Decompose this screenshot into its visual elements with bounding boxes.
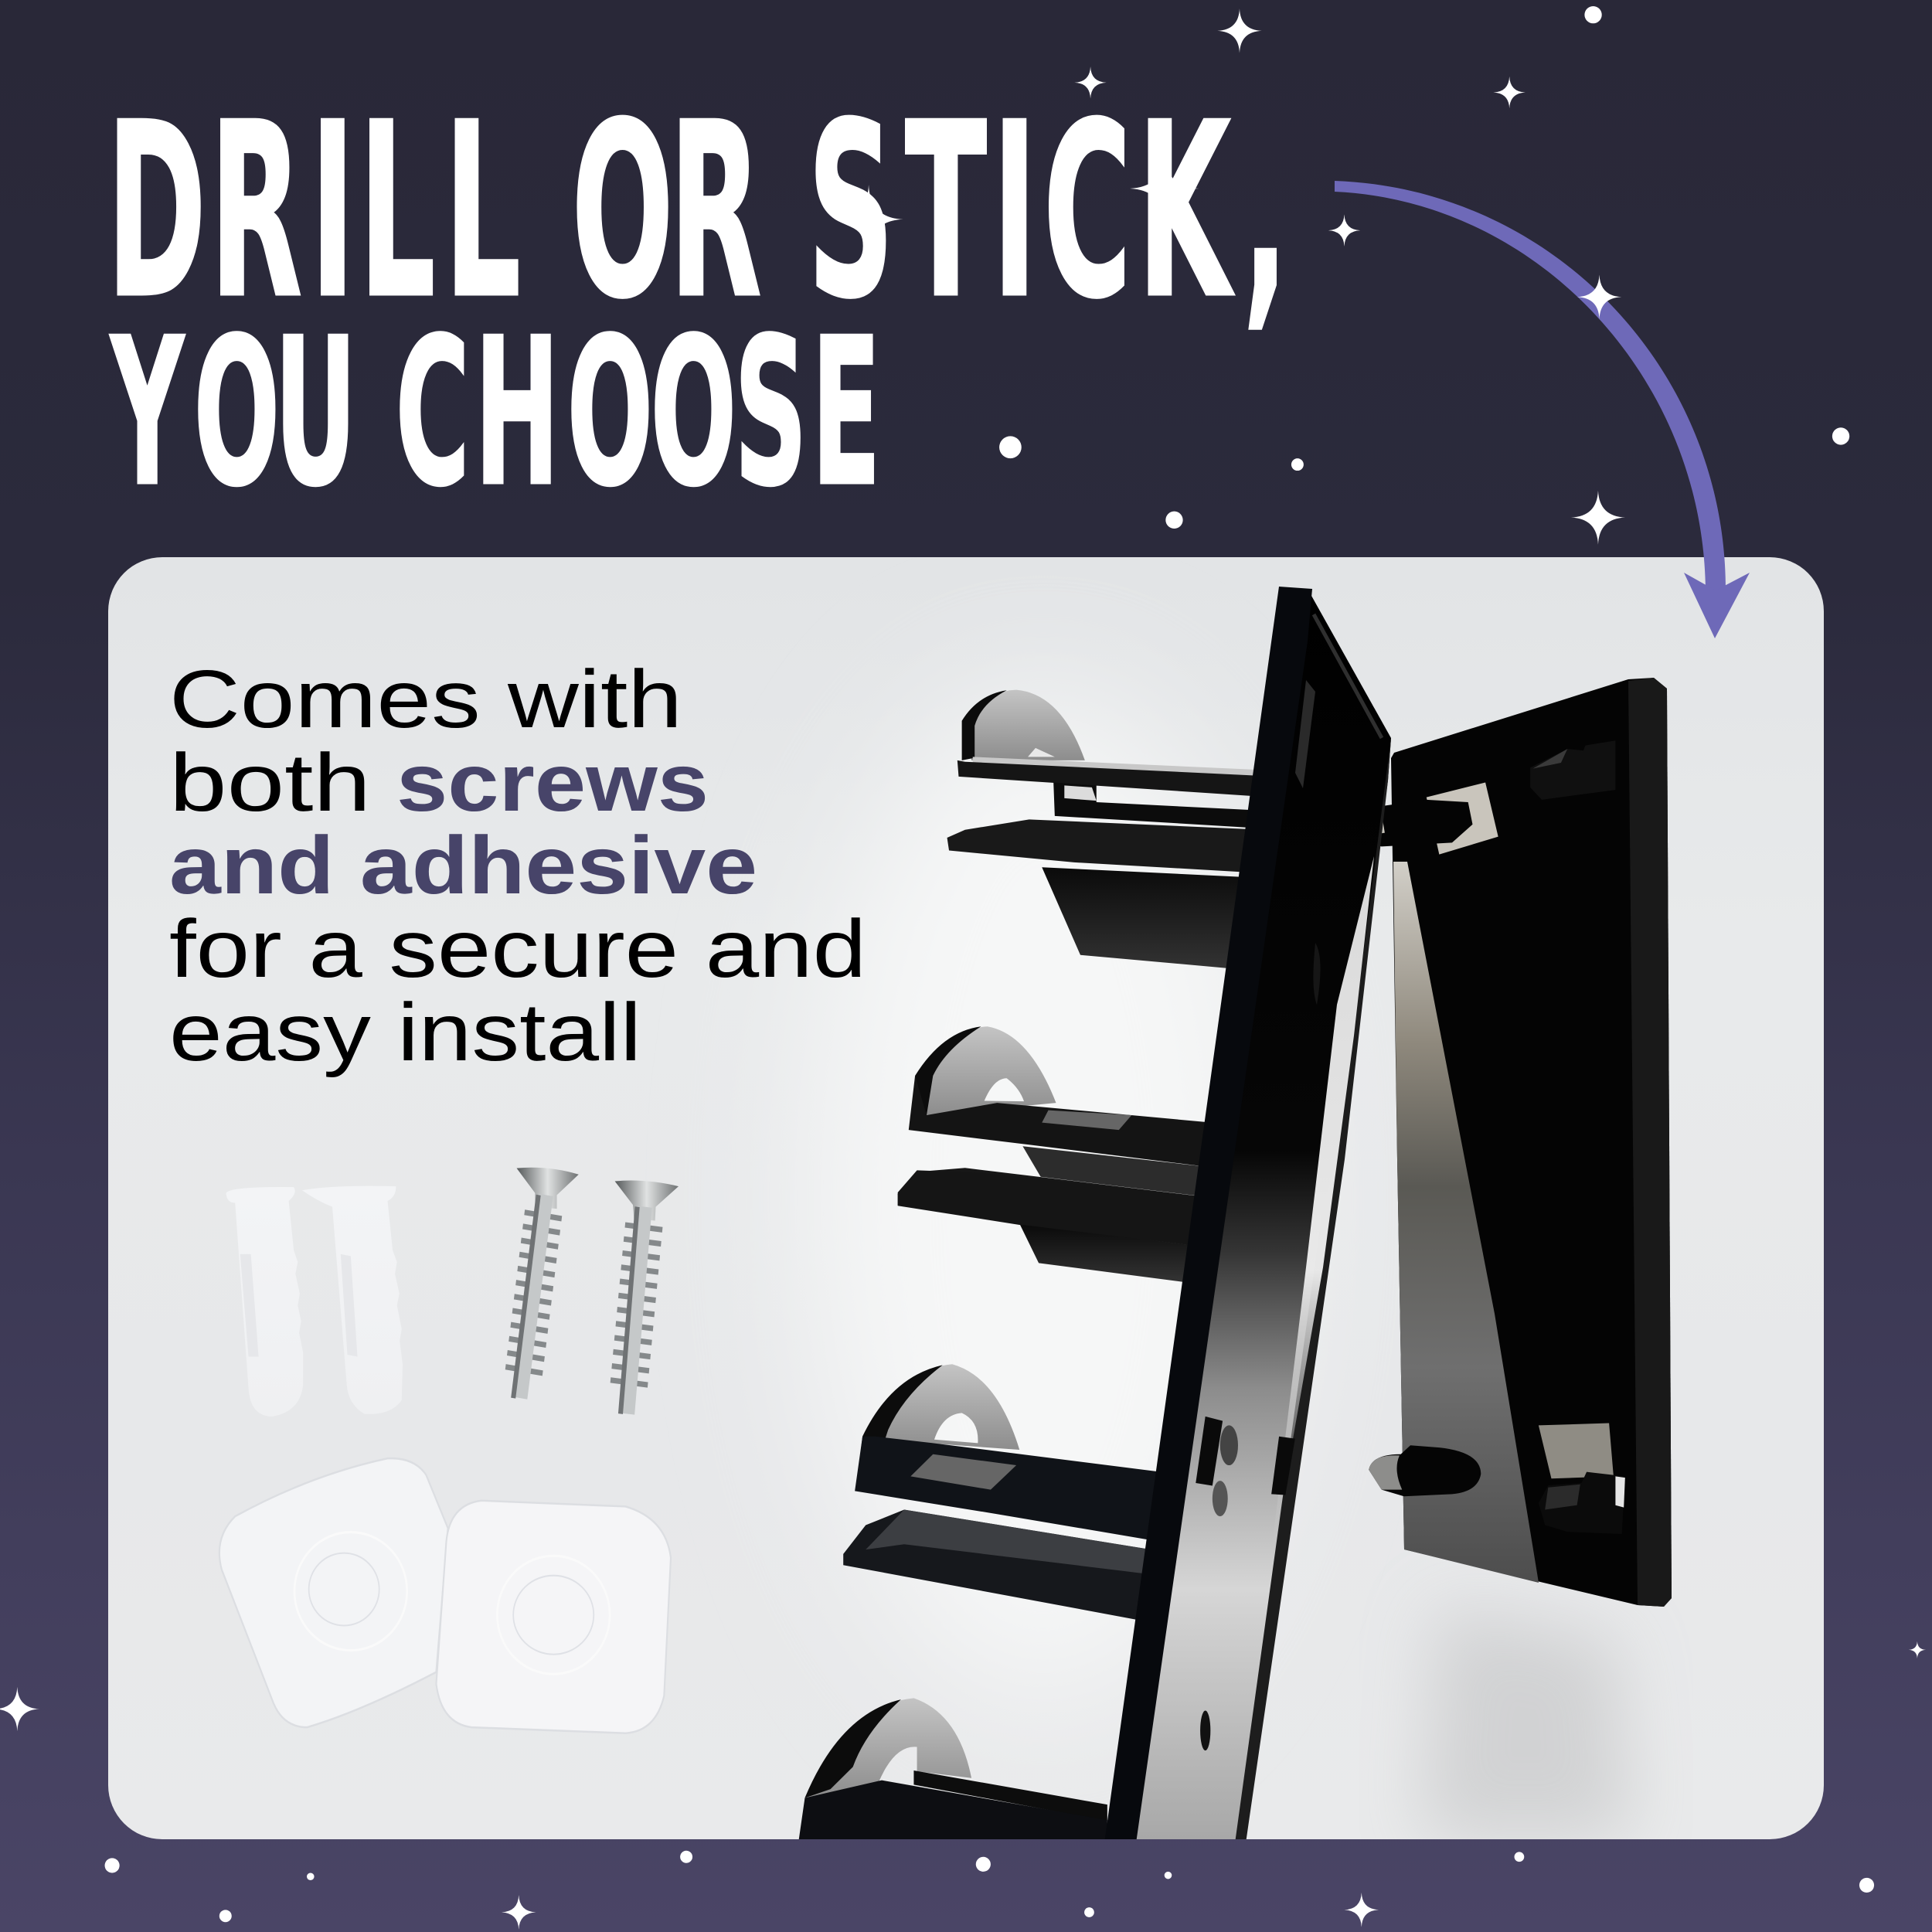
text block: description: easy install [169, 987, 641, 1078]
photo: shelf tier 2 [898, 1026, 1212, 1283]
panel background [108, 557, 1824, 1839]
title: DRILL OR STICK, [107, 72, 1288, 352]
title: YOU CHOOSE [109, 295, 881, 532]
text block: description: and adhesive [169, 820, 757, 911]
notches and holes [1196, 1417, 1295, 1750]
photo: back wall plate [1340, 678, 1672, 1607]
connector bridge [1427, 783, 1498, 855]
text block: description: screws [396, 737, 709, 828]
title [107, 72, 1288, 532]
arrow [1335, 181, 1750, 638]
wall shadow [1422, 1607, 1631, 1839]
photo: shelf tier 3 and 4 [798, 1170, 1203, 1842]
photo: screws [513, 1168, 679, 1413]
tier 3 [862, 1364, 1019, 1450]
photo: shelf tier 1 [947, 690, 1257, 969]
text block: description: both [169, 737, 371, 828]
photo: adhesive pads [219, 1458, 671, 1733]
panel: product photo card [108, 557, 1824, 1843]
pegs lower [1369, 1423, 1625, 1510]
photo: wall anchors [226, 1186, 403, 1417]
text block: description: Comes with [169, 654, 682, 745]
photo: front bracket plate [1104, 587, 1391, 1843]
peg upper right [1380, 740, 1615, 855]
wall glow [821, 710, 1226, 1663]
text block: description: for a secure and [169, 903, 866, 995]
tier 4 [804, 1698, 971, 1798]
text block: description [169, 654, 866, 1078]
